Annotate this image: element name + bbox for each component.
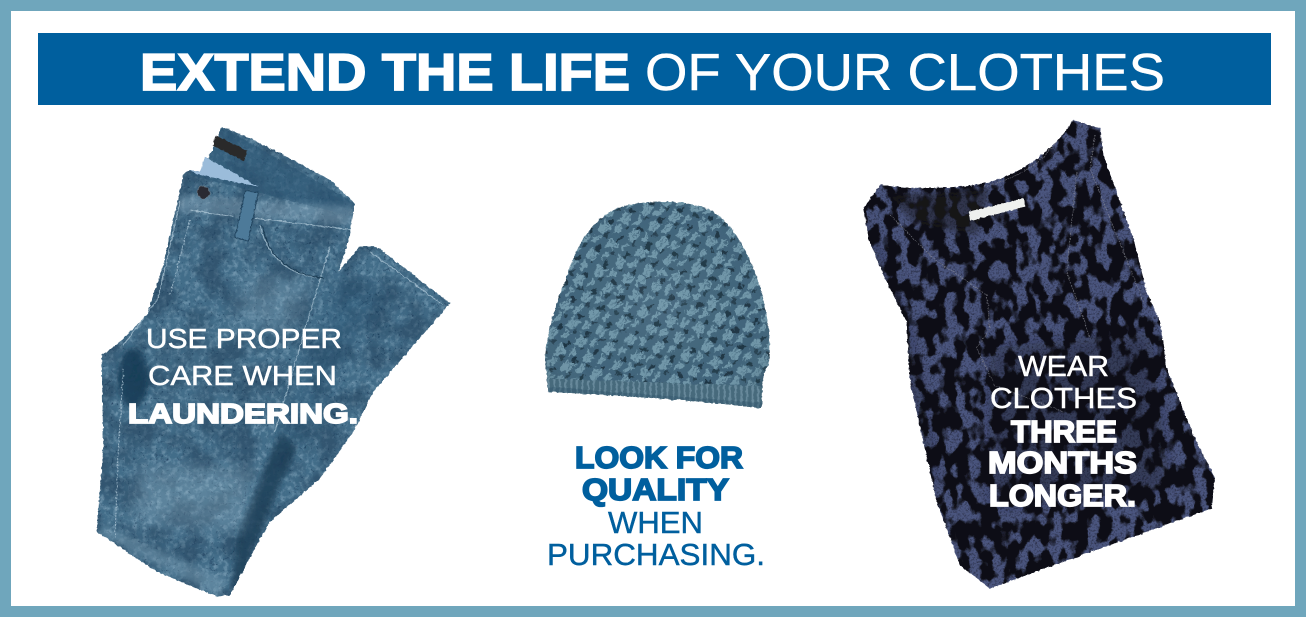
- darker folds: [118, 348, 148, 408]
- seams: [115, 202, 443, 538]
- callout: jeans caption: LAUNDERING.: [128, 398, 358, 429]
- inner lining: [190, 157, 258, 187]
- callout: jeans caption: CARE WHEN: [148, 360, 337, 391]
- callout: tank caption: MONTHS: [988, 445, 1137, 480]
- callout: hat caption: [547, 440, 765, 572]
- callout: tank caption: WEAR: [1018, 351, 1109, 383]
- inner tag: [213, 136, 247, 161]
- callout: hat caption: PURCHASING.: [547, 537, 765, 572]
- callout: tank caption: LONGER.: [989, 478, 1136, 513]
- waist shading: [190, 127, 355, 215]
- tank seams: [890, 130, 1143, 412]
- icon: knit beanie hat: [544, 201, 770, 408]
- hat ribbed band: [546, 378, 763, 408]
- icon: folded jeans illustration: [90, 115, 460, 605]
- title banner: EXTEND THE LIFE: [140, 44, 630, 102]
- icon: leopard print tank top: [850, 115, 1220, 595]
- callout: tank caption: CLOTHES: [990, 383, 1137, 415]
- callout: tank caption: THREE: [1011, 414, 1117, 449]
- title banner: OF YOUR CLOTHES: [645, 44, 1165, 102]
- button: [197, 186, 210, 199]
- dark top shading and hem shading: [887, 188, 990, 235]
- callout: jeans caption: USE PROPER: [146, 323, 342, 354]
- callout: hat caption: WHEN: [608, 505, 703, 540]
- callout: hat caption: LOOK FOR: [575, 440, 743, 475]
- callout: tank caption: [988, 351, 1137, 513]
- callout: jeans caption: [128, 323, 358, 429]
- belt loop: [235, 191, 258, 241]
- callout: hat caption: QUALITY: [582, 472, 729, 507]
- neck tag: [969, 198, 1025, 221]
- title banner: [38, 33, 1271, 105]
